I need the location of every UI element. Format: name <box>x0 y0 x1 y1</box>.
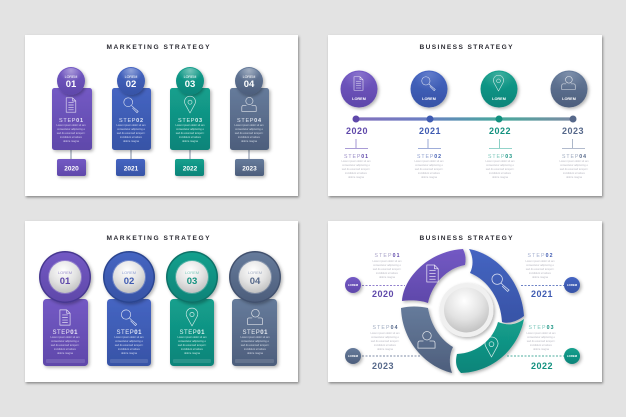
callout 2022: LOREM <box>567 354 578 358</box>
callout 2021: dolore magna <box>532 275 548 279</box>
pearl card 3: dolore magna <box>184 351 200 355</box>
icon: person <box>418 331 435 348</box>
pearl card 2: consectetur adipiscing e <box>115 339 143 343</box>
milestone 2022 <box>480 70 518 179</box>
callout 2020: dolore magna <box>379 275 395 279</box>
pearl card 4: STEP01 <box>242 330 268 336</box>
segment: green <box>456 319 524 373</box>
panel: marketing strategy timeline cards <box>25 35 298 196</box>
callout 2023: Lorem ipsum dolor sit am <box>370 331 400 335</box>
pearl card 3: sed do eiusmod tempor i <box>178 343 207 347</box>
step card 4: sed do eiusmod tempor i <box>235 131 264 135</box>
callout 2021: consectetur adipiscing e <box>526 263 554 267</box>
callout 2020: Lorem ipsum dolor sit am <box>372 259 402 263</box>
milestone 2022: dolore magna <box>492 175 508 179</box>
step card 4: 2023 <box>242 166 257 172</box>
milestone 2023: sed do eiusmod tempor i <box>560 167 589 171</box>
step card 3: 2022 <box>183 166 198 172</box>
milestone 2022: consectetur adipiscing e <box>486 163 514 167</box>
icon: magnifier <box>492 274 509 292</box>
step card 1 <box>52 67 92 176</box>
callout 2021: 2021 <box>531 289 553 299</box>
cycle diagram <box>401 249 524 373</box>
callout 2023: STEP04 <box>372 325 398 331</box>
callout 2023: consectetur adipiscing e <box>371 335 399 339</box>
callout 2021: sed do eiusmod tempor i <box>526 267 555 271</box>
pearl card 3: Lorem ipsum dolor sit am <box>177 335 207 339</box>
milestone 2021: dolore magna <box>421 175 437 179</box>
callout 2020: STEP01 <box>374 253 400 259</box>
pearl card 4: sed do eiusmod tempor i <box>241 343 270 347</box>
pearl card 2: 02 <box>124 276 134 287</box>
panel: business strategy timeline <box>328 35 602 196</box>
step card 2: consectetur adipiscing e <box>117 127 145 131</box>
pearl card 4: dolore magna <box>247 351 263 355</box>
pearl card 1: 01 <box>60 276 71 287</box>
step card 4: dolore magna <box>241 139 257 143</box>
step card 4: 04 <box>244 79 255 90</box>
milestone 2020: Lorem ipsum dolor sit am <box>341 159 371 163</box>
pearl card 3: consectetur adipiscing e <box>178 339 206 343</box>
pearl card 1: sed do eiusmod tempor i <box>51 343 80 347</box>
milestone 2023: Lorem ipsum dolor sit am <box>559 159 589 163</box>
callout 2023: LOREM <box>348 354 359 358</box>
title: marketing strategy lower: MARKETING STRATEGY <box>106 235 210 242</box>
pearl card 1: incididunt ut labore <box>54 347 76 351</box>
milestone 2023: consectetur adipiscing e <box>560 163 588 167</box>
pearl card 2: incididunt ut labore <box>118 347 140 351</box>
milestone 2022: STEP03 <box>488 154 512 160</box>
callout 2022 <box>507 325 580 371</box>
milestone 2021: consectetur adipiscing e <box>415 163 443 167</box>
pearl card 1: Lorem ipsum dolor sit am <box>50 335 80 339</box>
milestone 2023: 2023 <box>562 126 584 136</box>
step card 2: incididunt ut labore <box>120 135 142 139</box>
callout 2020 <box>345 253 405 299</box>
icon: location pin <box>485 337 498 357</box>
panel: marketing strategy pearl cards <box>25 221 298 382</box>
step card 2: Lorem ipsum dolor sit am <box>116 123 146 127</box>
step card 2 <box>112 67 151 176</box>
pearl card 3: STEP01 <box>180 330 205 336</box>
step card 4: STEP04 <box>237 118 262 124</box>
pearl card 2: Lorem ipsum dolor sit am <box>114 335 144 339</box>
callout 2022: consectetur adipiscing e <box>527 335 555 339</box>
step card 3: LOREM <box>184 75 196 79</box>
icon: document <box>427 265 438 282</box>
callout 2022: sed do eiusmod tempor i <box>527 339 556 343</box>
milestone 2023: dolore magna <box>566 175 582 179</box>
callout 2023: sed do eiusmod tempor i <box>371 339 400 343</box>
segment: blue <box>469 249 524 323</box>
step card 1: dolore magna <box>63 139 79 143</box>
panel: business strategy cycle diagram <box>328 221 602 382</box>
pearl card 4: consectetur adipiscing e <box>241 339 269 343</box>
pearl card 4: Lorem ipsum dolor sit am <box>240 335 270 339</box>
milestone 2022: 2022 <box>489 126 511 136</box>
step card 4 <box>230 67 269 176</box>
timeline bar <box>352 116 576 122</box>
callout 2021: LOREM <box>567 283 578 287</box>
callout 2020: 2020 <box>372 289 394 299</box>
callout 2022: 2022 <box>531 361 553 371</box>
step card 2: dolore magna <box>123 139 139 143</box>
pearl card 3: LOREM <box>185 270 199 275</box>
callout 2023 <box>345 325 420 371</box>
pearl card 1: dolore magna <box>57 351 73 355</box>
pearl card 4: LOREM <box>248 270 262 275</box>
callout 2023: incididunt ut labore <box>374 343 396 347</box>
callout 2020: incididunt ut labore <box>376 271 398 275</box>
milestone 2023: STEP04 <box>562 154 586 160</box>
step card 1: consectetur adipiscing e <box>57 127 85 131</box>
step card 3: 03 <box>185 79 195 90</box>
title: business strategy: BUSINESS STRATEGY <box>420 44 513 51</box>
title: marketing strategy: MARKETING STRATEGY <box>106 44 210 51</box>
step card 1: 2020 <box>64 166 79 172</box>
step card 2: STEP02 <box>119 118 143 124</box>
callout 2020: sed do eiusmod tempor i <box>373 267 402 271</box>
step card 1: STEP01 <box>59 118 83 124</box>
milestone 2021 <box>410 70 448 179</box>
step card 4: consectetur adipiscing e <box>235 127 263 131</box>
step card 3: dolore magna <box>182 139 198 143</box>
milestone 2021: STEP02 <box>417 154 441 160</box>
segment: slate <box>401 306 453 373</box>
step card 1: incididunt ut labore <box>60 135 82 139</box>
step card 1: LOREM <box>65 75 77 79</box>
callout 2021: STEP02 <box>528 253 553 259</box>
milestone 2023: incididunt ut labore <box>563 171 585 175</box>
step card 3: incididunt ut labore <box>179 135 201 139</box>
step card 4: LOREM <box>243 75 255 79</box>
callout 2022: Lorem ipsum dolor sit am <box>526 331 556 335</box>
step card 2: 2021 <box>124 166 139 172</box>
step card 3: STEP03 <box>178 118 202 124</box>
pearl card 4: 04 <box>250 276 261 287</box>
milestone 2021: incididunt ut labore <box>418 171 440 175</box>
step card 2: 02 <box>126 79 136 90</box>
pearl card 1: consectetur adipiscing e <box>51 339 79 343</box>
pearl card 2: dolore magna <box>121 351 137 355</box>
callout 2022: dolore magna <box>533 347 549 351</box>
callout 2021: Lorem ipsum dolor sit am <box>525 259 555 263</box>
callout 2022: incididunt ut labore <box>530 343 552 347</box>
pearl card 4: incididunt ut labore <box>244 347 266 351</box>
step card 2: sed do eiusmod tempor i <box>117 131 146 135</box>
milestone 2023: LOREM <box>562 97 576 101</box>
center sphere <box>440 283 494 337</box>
pearl card 1 <box>39 251 91 366</box>
milestone 2021: LOREM <box>422 97 436 101</box>
milestone 2020: consectetur adipiscing e <box>342 163 370 167</box>
milestone 2020: STEP01 <box>344 154 368 160</box>
pearl card 2: STEP01 <box>116 330 142 336</box>
milestone 2020 <box>340 70 378 179</box>
callout 2023: dolore magna <box>377 347 393 351</box>
step card 1: Lorem ipsum dolor sit am <box>56 123 86 127</box>
milestone 2022: incididunt ut labore <box>489 171 511 175</box>
milestone 2021: 2021 <box>419 126 441 136</box>
segment: purple <box>402 249 466 303</box>
step card 4: incididunt ut labore <box>238 135 260 139</box>
callout 2022: STEP03 <box>528 325 554 331</box>
step card 1: sed do eiusmod tempor i <box>57 131 86 135</box>
pearl card 2: sed do eiusmod tempor i <box>115 343 144 347</box>
step card 1: 01 <box>66 79 77 90</box>
step card 3: consectetur adipiscing e <box>176 127 204 131</box>
milestone 2023 <box>550 70 589 179</box>
step card 3: Lorem ipsum dolor sit am <box>175 123 205 127</box>
milestone 2020: 2020 <box>346 126 368 136</box>
step card 2: LOREM <box>125 75 137 79</box>
step card 4: Lorem ipsum dolor sit am <box>234 123 264 127</box>
milestone 2020: sed do eiusmod tempor i <box>342 167 371 171</box>
milestone 2021: sed do eiusmod tempor i <box>415 167 444 171</box>
step card 3: sed do eiusmod tempor i <box>176 131 205 135</box>
title: business strategy lower: BUSINESS STRATEGY <box>420 235 513 242</box>
pearl card 2 <box>103 251 155 366</box>
pearl card 1: STEP01 <box>52 330 78 336</box>
milestone 2022: sed do eiusmod tempor i <box>486 167 515 171</box>
pearl card 2: LOREM <box>122 270 136 275</box>
pearl card 3: incididunt ut labore <box>181 347 203 351</box>
callout 2021 <box>521 253 580 299</box>
milestone 2022: Lorem ipsum dolor sit am <box>485 159 515 163</box>
callout 2021: incididunt ut labore <box>529 271 551 275</box>
callout 2023: 2023 <box>372 361 394 371</box>
milestone 2020: LOREM <box>352 97 366 101</box>
step card 3 <box>170 67 210 176</box>
milestone 2022: LOREM <box>492 97 506 101</box>
pearl card 1: LOREM <box>58 270 72 275</box>
callout 2020: LOREM <box>348 283 359 287</box>
callout 2020: consectetur adipiscing e <box>373 263 401 267</box>
pearl card 3: 03 <box>187 276 197 287</box>
milestone 2020: incididunt ut labore <box>345 171 367 175</box>
pearl card 3 <box>166 251 218 366</box>
milestone 2021: Lorem ipsum dolor sit am <box>414 159 444 163</box>
milestone 2020: dolore magna <box>348 175 364 179</box>
pearl card 4 <box>229 251 281 366</box>
